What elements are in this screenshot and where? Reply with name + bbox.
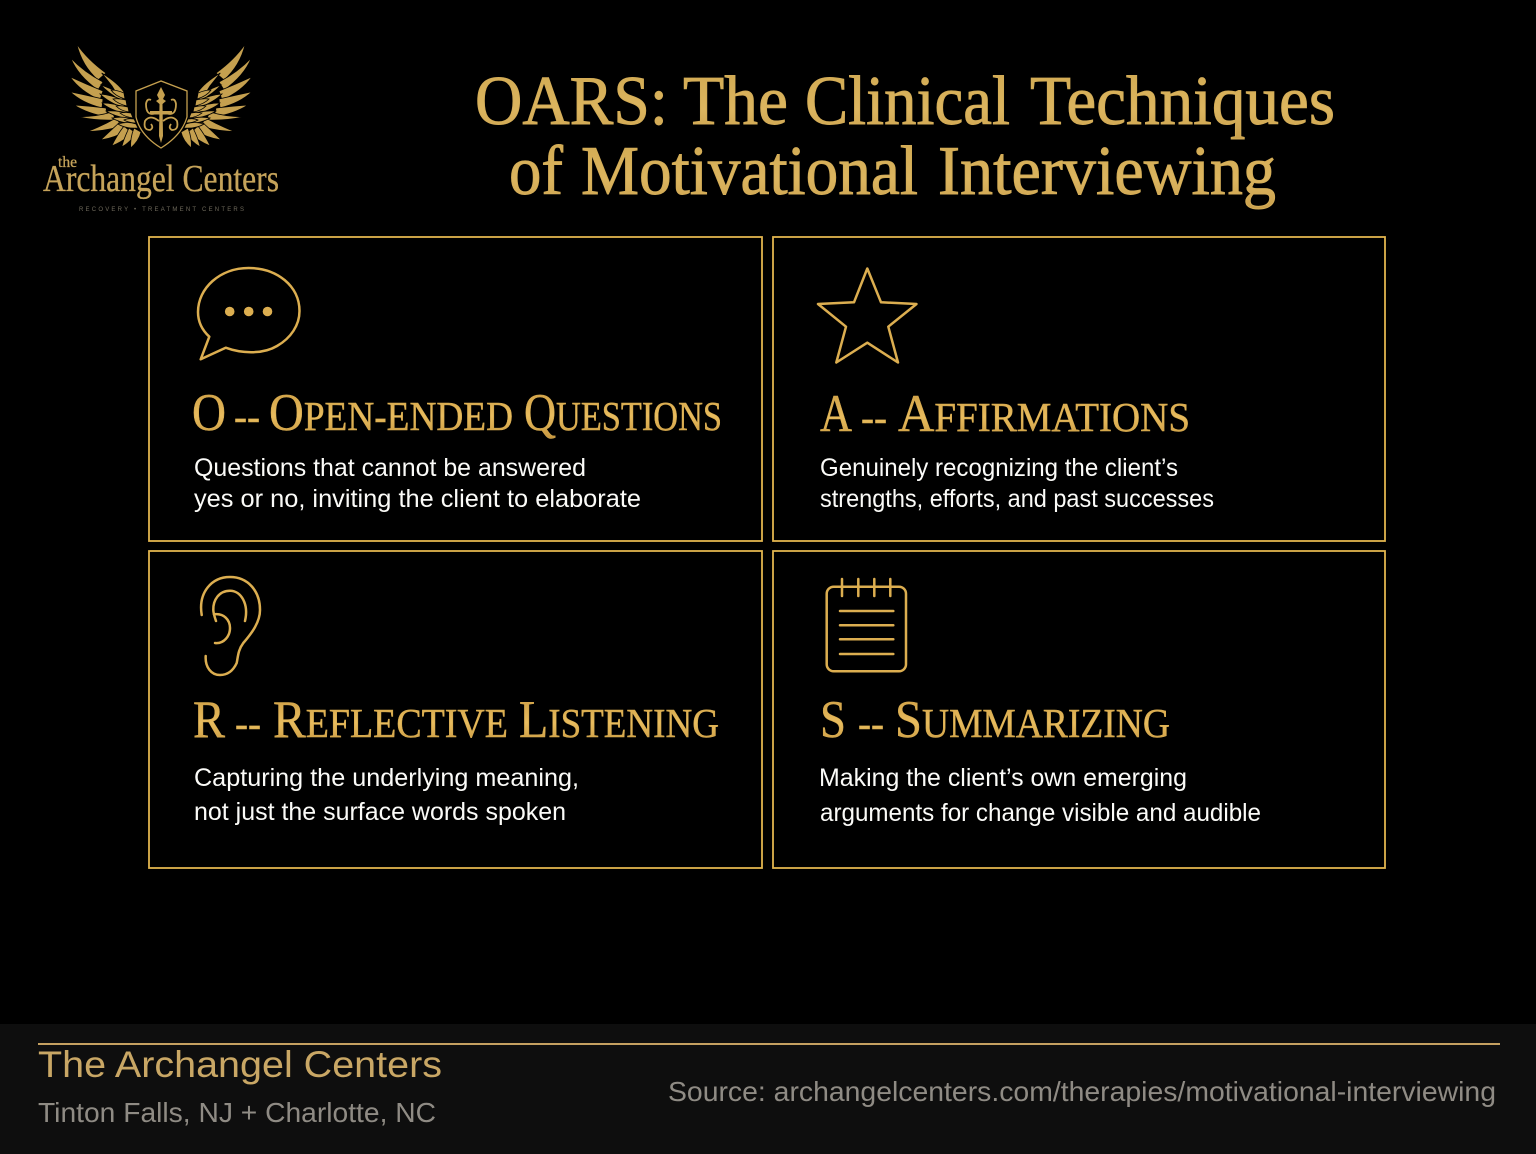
heading: S: -- (858, 700, 884, 746)
footer source: Source: archangelcenters.com/therapies/motivational-interviewing (668, 1076, 1496, 1107)
heading: R (193, 691, 719, 749)
icon: shield (136, 81, 187, 148)
heading: R: -- (235, 700, 261, 746)
footer (0, 1024, 1536, 1154)
icon: notepad (827, 579, 906, 671)
title: Motivational (581, 133, 918, 210)
title: The (683, 63, 788, 140)
heading: A: A (820, 385, 852, 443)
heading: R: REFLECTIVE (273, 691, 508, 749)
heading: S: S (820, 691, 846, 749)
title (475, 63, 1335, 210)
heading: A: -- (861, 394, 887, 440)
panel: Reflective Listening (149, 551, 762, 868)
description: S: Making the client’s own emerging (819, 764, 1187, 792)
description: A: strengths, efforts, and past successes (820, 485, 1214, 513)
description: O: yes or no, inviting the client to elaborate (194, 485, 641, 513)
icon: ear (201, 577, 260, 675)
logo wordmark: the (58, 154, 77, 171)
heading: O: OPEN-ENDED (269, 384, 513, 442)
title: OARS: (475, 63, 668, 140)
heading: O (192, 384, 722, 442)
description: O: Questions that cannot be answered (194, 454, 586, 482)
footer organisation name: The Archangel Centers (38, 1043, 442, 1085)
description: R: Capturing the underlying meaning, (194, 764, 579, 792)
description: R (194, 764, 579, 826)
panel: Summarizing (773, 551, 1385, 868)
panel: Open-ended Questions (149, 237, 762, 541)
description: A (820, 454, 1214, 513)
heading: O: O (192, 384, 226, 442)
heading: O: -- (234, 393, 260, 439)
description: R: not just the surface words spoken (194, 798, 566, 826)
description: S (819, 764, 1261, 827)
logo: The Archangel Centers (43, 44, 279, 213)
icon: right wing (181, 44, 252, 148)
title: Techniques (1030, 63, 1335, 140)
title: of (509, 133, 564, 210)
heading: A: AFFIRMATIONS (898, 385, 1190, 443)
heading: R: R (193, 691, 226, 749)
heading: O: QUESTIONS (524, 384, 722, 442)
icon: left wing (70, 44, 141, 148)
logo wordmark: Archangel Centers (43, 158, 279, 200)
description: S: arguments for change visible and audible (820, 799, 1261, 827)
description: O (194, 454, 641, 513)
logo tagline: RECOVERY • TREATMENT CENTERS (79, 207, 244, 213)
icon: speech bubble (198, 268, 300, 359)
heading: R: LISTENING (519, 691, 719, 749)
panel: Affirmations (773, 237, 1385, 541)
title: Clinical (805, 63, 1010, 140)
title: Interviewing (938, 133, 1276, 210)
heading: S: SUMMARIZING (895, 691, 1170, 749)
description: A: Genuinely recognizing the client’s (820, 454, 1178, 482)
footer locations: Tinton Falls, NJ + Charlotte, NC (38, 1097, 436, 1128)
icon: star (818, 268, 916, 362)
